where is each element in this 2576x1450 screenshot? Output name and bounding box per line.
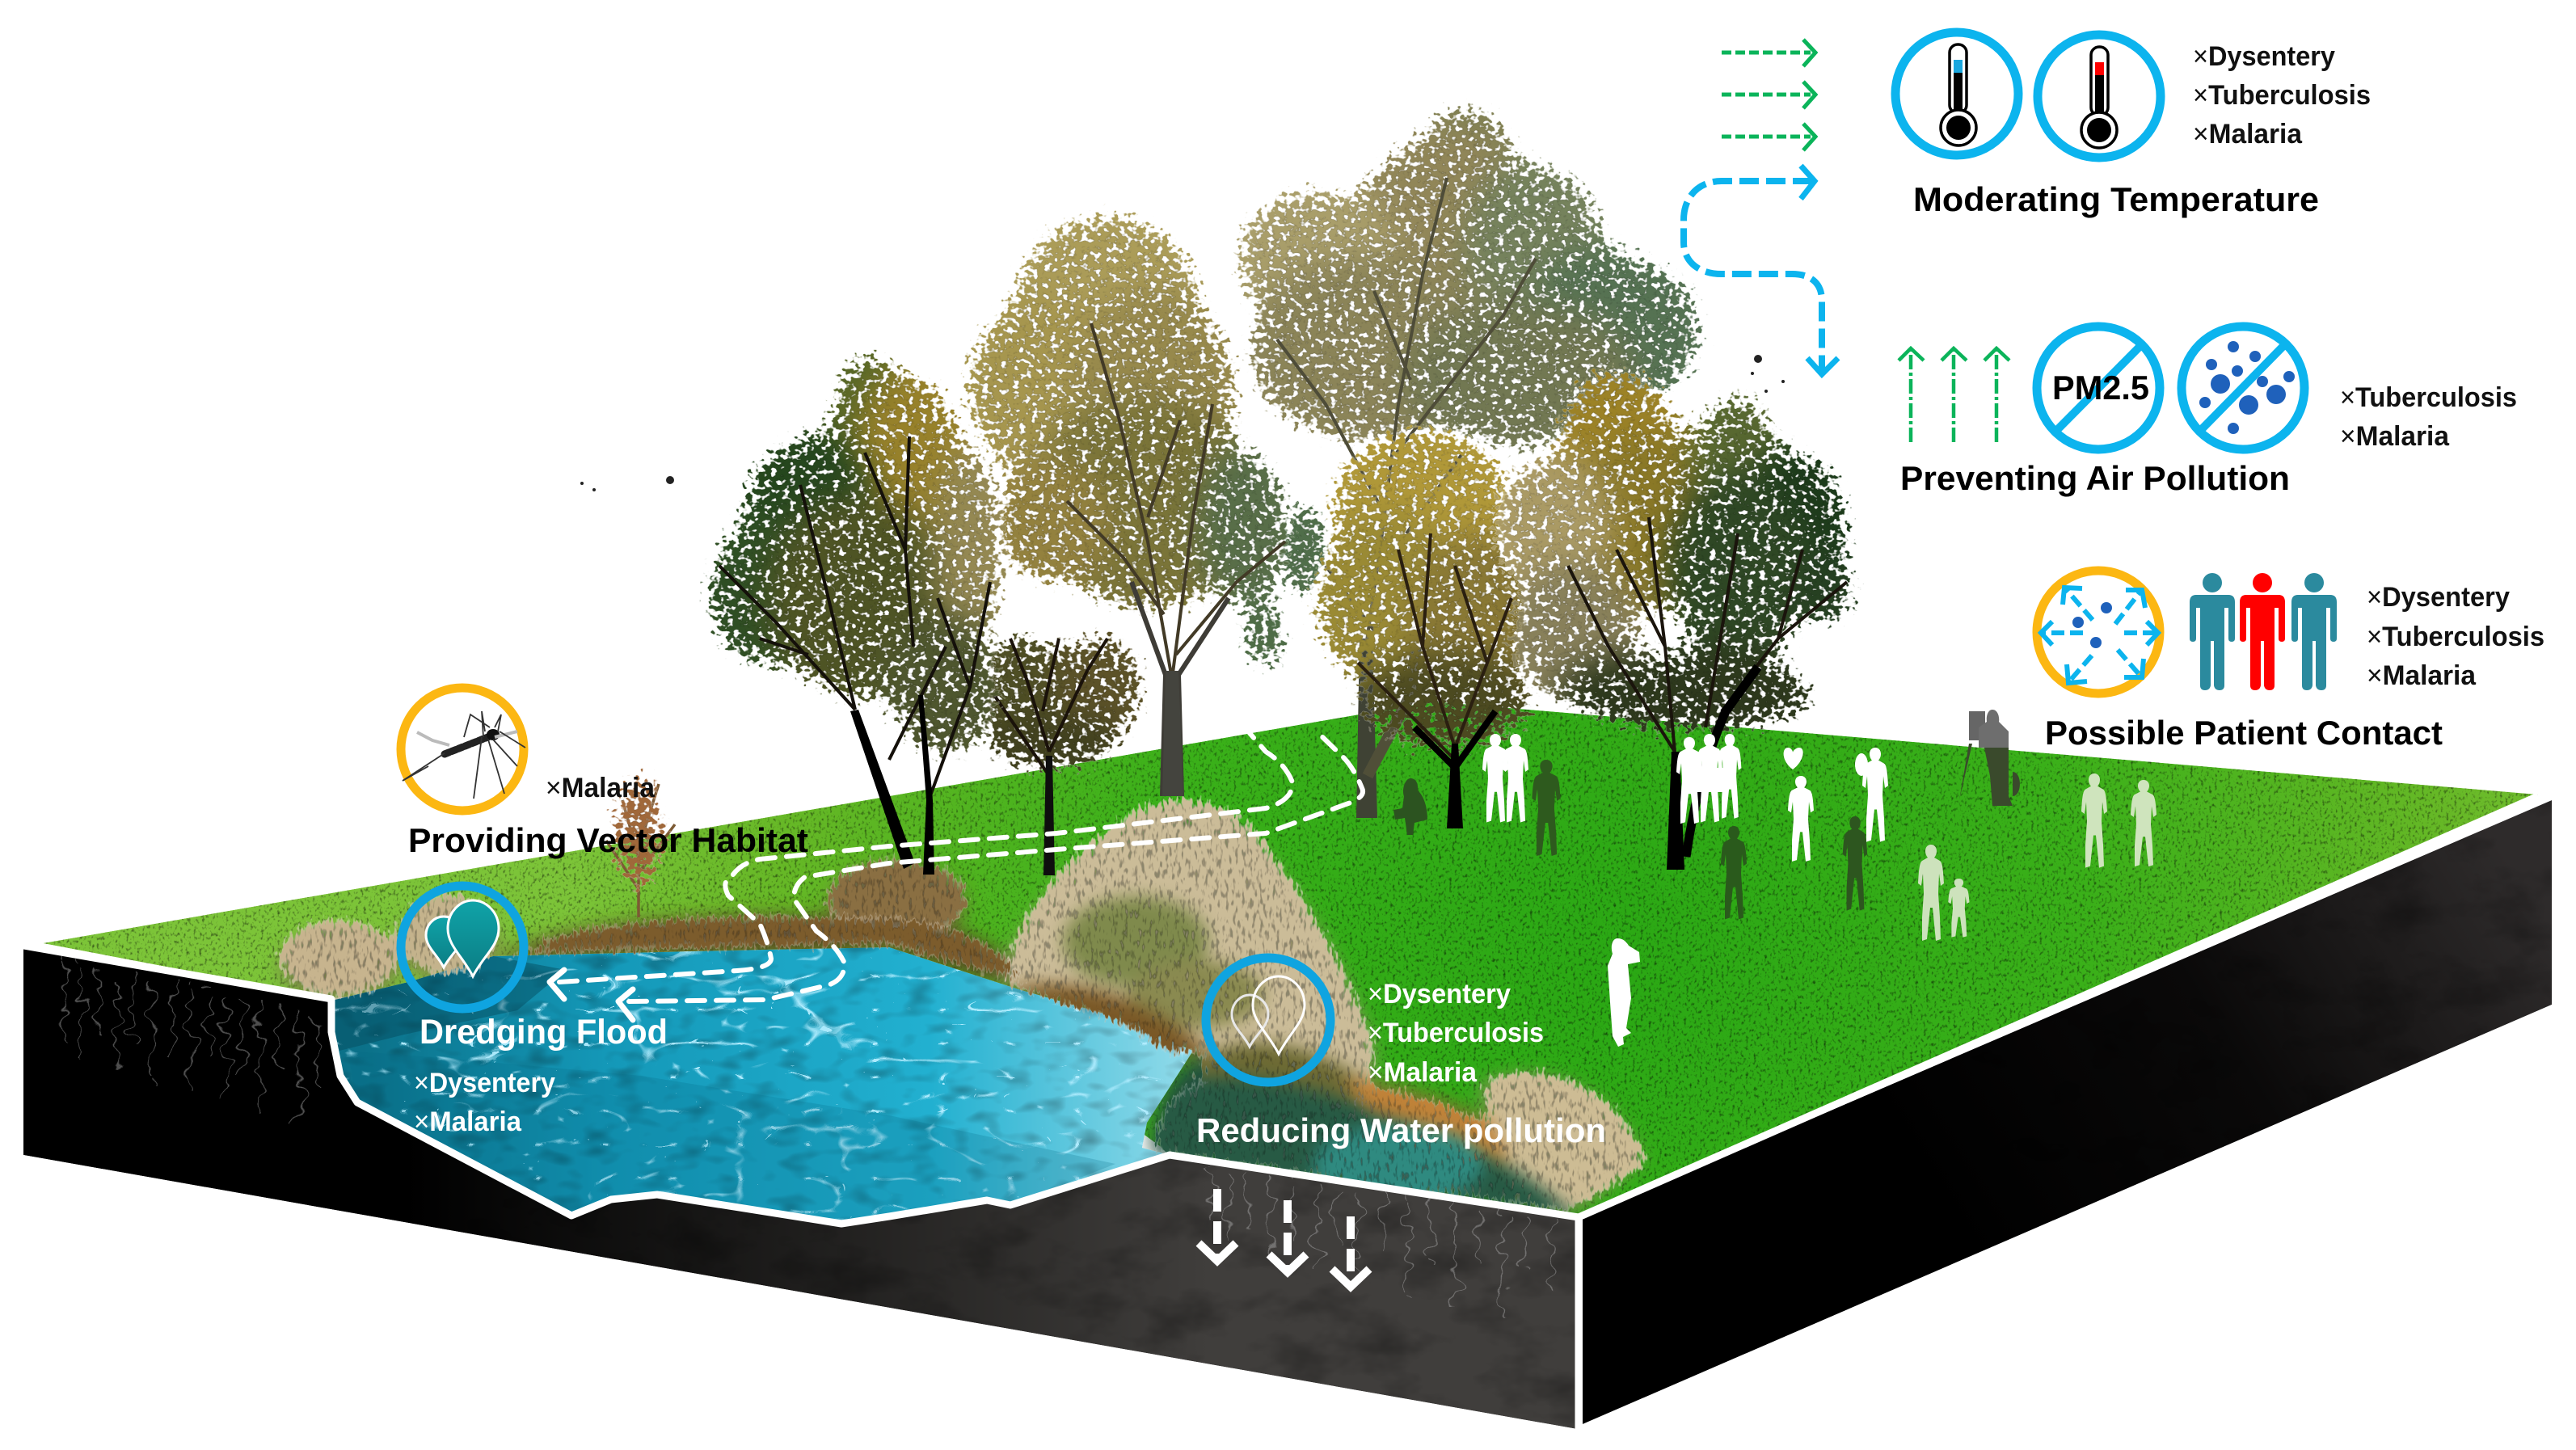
heart balloon xyxy=(1784,748,1803,769)
list: dredging flood diseases: ×Dysentery xyxy=(414,1068,555,1098)
list: patient contact diseases: ×Tuberculosis xyxy=(2367,622,2544,652)
white person xyxy=(1788,776,1814,862)
list: temperature diseases: ×Malaria xyxy=(2193,119,2303,150)
icon: no airborne particles xyxy=(2182,327,2304,449)
list: dredging flood diseases xyxy=(414,1068,555,1137)
dashed white infiltration arrows xyxy=(1199,1189,1369,1287)
heading: reducing water pollution: Reducing Water pollution xyxy=(1196,1111,1606,1149)
white person with balloon xyxy=(1855,748,1888,842)
plant roots in soil xyxy=(65,962,1552,1309)
list: water pollution diseases: ×Tuberculosis xyxy=(1368,1018,1544,1048)
list: air pollution diseases: ×Tuberculosis xyxy=(2340,382,2517,413)
dashed white water flow with arrowheads xyxy=(550,731,1363,1020)
white group xyxy=(1676,734,1741,824)
airborne leaf specks xyxy=(580,355,1785,491)
people silhouettes xyxy=(1393,710,2157,1047)
soil block: front cross-section xyxy=(23,947,1577,1429)
tree: front middle tree xyxy=(1301,416,1555,828)
dark standing person xyxy=(1721,826,1747,919)
icon: patient contact spread circle xyxy=(2037,571,2160,693)
small shrub tree near pond xyxy=(601,760,676,917)
icon: teal person right xyxy=(2291,573,2337,690)
heading: providing vector habitat: Providing Vector Habitat xyxy=(408,821,808,859)
icon: dredging flood circle with drops xyxy=(401,886,524,1009)
faded pair of walkers xyxy=(2081,773,2157,868)
heading: moderating temperature: Moderating Temperature xyxy=(1913,180,2319,218)
seated person with dog xyxy=(1393,778,1427,835)
waterside reeds and shrubs xyxy=(275,795,1653,1216)
tree: left dark tree xyxy=(695,339,1016,875)
green dashed wind arrows xyxy=(1722,40,1815,150)
list: air pollution diseases: ×Malaria xyxy=(2340,421,2450,452)
list: patient contact diseases xyxy=(2367,582,2544,691)
icon: mosquito in yellow circle xyxy=(401,688,525,811)
icon: no PM2.5 xyxy=(2037,327,2160,449)
tree: small dark tree xyxy=(962,622,1156,875)
pond xyxy=(331,947,1193,1224)
list: water pollution diseases: ×Dysentery xyxy=(1368,979,1511,1010)
tree: tall rear tree xyxy=(1225,93,1714,818)
list: air pollution diseases xyxy=(2340,382,2517,452)
blue dashed airflow arrow xyxy=(1684,166,1838,374)
tree: tall centre tree xyxy=(954,202,1302,796)
white couple xyxy=(1482,734,1528,822)
shaded near shore xyxy=(331,956,566,1051)
list: temperature diseases: ×Dysentery xyxy=(2193,41,2335,72)
faded adult with child xyxy=(1918,845,1970,941)
icon: no PM2.5: PM2.5 xyxy=(2052,369,2149,407)
deeper water band xyxy=(348,1051,1115,1224)
green upward arrows xyxy=(1899,348,2009,442)
list: water pollution diseases xyxy=(1368,979,1544,1088)
dark walking person xyxy=(1843,816,1867,911)
heading: dredging flood: Dredging Flood xyxy=(419,1013,668,1052)
icon: thermometer cool xyxy=(1895,32,2018,155)
list: patient contact diseases: ×Dysentery xyxy=(2367,582,2510,613)
icon: teal person left xyxy=(2190,573,2235,690)
list: patient contact diseases: ×Malaria xyxy=(2367,660,2477,691)
soil block: right side face xyxy=(1583,800,2552,1424)
list: water pollution diseases: ×Malaria xyxy=(1368,1057,1478,1088)
list: dredging flood diseases: ×Malaria xyxy=(414,1106,522,1137)
dark person xyxy=(1532,760,1561,856)
photographer with tripod xyxy=(1959,710,2020,806)
waterside soil and vegetation underlay xyxy=(281,823,1641,1216)
icon: reducing water pollution circle with drops xyxy=(1206,958,1330,1082)
icon: red infected person xyxy=(2240,573,2285,690)
grass surface xyxy=(43,702,2538,1215)
heading: preventing air pollution: Preventing Air Pollution xyxy=(1900,459,2290,497)
block white edges xyxy=(23,796,2538,1429)
heading: possible patient contact: Possible Patient Contact xyxy=(2045,714,2443,752)
list: temperature diseases xyxy=(2193,41,2371,150)
pond bank xyxy=(493,913,1039,991)
list: temperature diseases: ×Tuberculosis xyxy=(2193,80,2371,111)
list: mosquito disease: ×Malaria xyxy=(546,773,656,803)
icon: thermometer warm xyxy=(2038,35,2161,158)
tree: right black tree xyxy=(1482,356,1866,870)
white person with binoculars xyxy=(1608,938,1640,1047)
